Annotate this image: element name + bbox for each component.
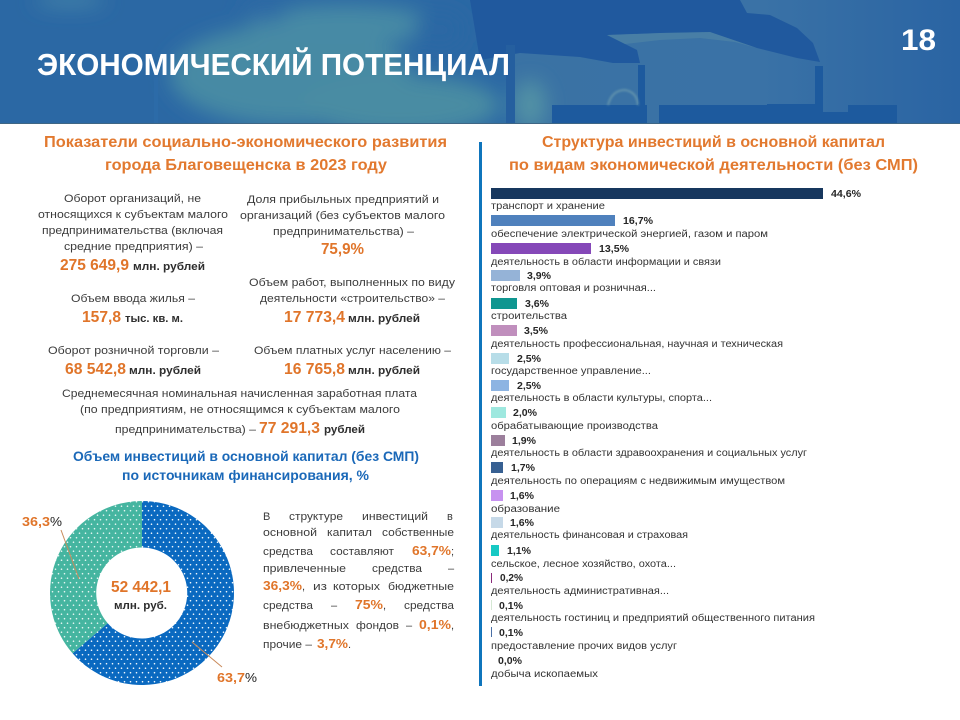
indicator: paid services: 16 765,8 xyxy=(284,361,345,378)
bar: other services xyxy=(491,627,677,652)
leader line 63.7 xyxy=(192,642,222,667)
bar: public administration xyxy=(491,353,651,377)
text block: investment structure description: бюджетные xyxy=(388,581,454,593)
indicator: average salary: (по предприятиям, не относящимся к субъектам малого xyxy=(80,404,400,416)
text block: investment structure description: средства xyxy=(263,546,314,558)
heading: investment sources: по источникам финансирования, % xyxy=(122,468,369,483)
indicator: organisations turnover: предпринимательства (включая xyxy=(42,225,223,237)
donut centre value: млн. руб. xyxy=(114,600,167,612)
text block: investment structure description: основной xyxy=(263,527,317,539)
bar: construction xyxy=(491,298,567,322)
indicator: organisations turnover: млн. рублей xyxy=(133,261,205,273)
leader line 36.3 xyxy=(61,530,79,579)
indicator: profitable enterprises share xyxy=(240,194,445,258)
text block: investment structure description: средства xyxy=(404,600,455,612)
indicator: profitable enterprises share: предпринимательства) – xyxy=(273,226,415,238)
text block: investment structure description: – xyxy=(448,563,455,575)
bar: mining xyxy=(491,656,598,680)
indicator: retail turnover: 68 542,8 xyxy=(65,361,126,378)
bar: trade: 3,9% xyxy=(527,271,551,282)
text block: investment structure description: фондов xyxy=(356,620,399,632)
indicator: housing: 157,8 xyxy=(82,309,121,326)
indicator: construction works: деятельности «строительство» – xyxy=(260,293,446,305)
bar: professional: деятельность профессиональная, научная и техническая xyxy=(491,338,783,350)
indicator: construction works: млн. рублей xyxy=(348,313,420,325)
bar: energy xyxy=(491,215,768,240)
bar: other services: предоставление прочих видов услуг xyxy=(491,641,677,652)
heading: investment structure: Структура инвестиций в основной капитал xyxy=(542,134,885,151)
text block: investment structure description: составляют xyxy=(330,546,394,558)
text block: investment structure description: собственные xyxy=(382,527,454,539)
text block: investment structure description: прочие – xyxy=(263,639,313,651)
text block: investment structure description: инвестиций xyxy=(362,511,428,523)
indicator: retail turnover xyxy=(48,345,220,378)
bar: hotels: 0,1% xyxy=(499,601,523,612)
bar chart: investments by activity xyxy=(491,188,861,680)
bar: manufacturing: 2,0% xyxy=(513,408,537,419)
indicator: average salary: 77 291,3 xyxy=(259,420,320,437)
text block: investment structure description: структуре xyxy=(289,511,343,523)
text block: investment structure description: средства xyxy=(263,600,314,612)
indicator: average salary: предпринимательства) – xyxy=(115,424,257,436)
indicator: profitable enterprises share: 75,9% xyxy=(321,241,364,258)
indicator: organisations turnover: средние предприятия) – xyxy=(64,241,204,253)
text block: investment structure description: капитал xyxy=(327,527,372,539)
label 63.7% xyxy=(217,670,257,685)
bar: trade xyxy=(491,270,656,294)
bar: finance: деятельность финансовая и страховая xyxy=(491,529,688,541)
bar: finance xyxy=(491,517,688,541)
bar: administrative: 0,2% xyxy=(500,573,523,584)
bar: administrative: деятельность административная... xyxy=(491,586,669,597)
label 36.3%: 36,3 xyxy=(22,514,50,529)
bar: agriculture: 1,1% xyxy=(507,546,531,557)
bar: mining: 0,0% xyxy=(498,656,522,667)
indicator: housing: тыс. кв. м. xyxy=(125,313,183,325)
donut centre value: 52 442,1 xyxy=(111,579,171,596)
bar: information: 13,5% xyxy=(599,244,629,255)
bar: transport: 44,6% xyxy=(831,189,861,200)
text block: investment structure description: , xyxy=(302,581,305,593)
indicator: profitable enterprises share: Доля прибыльных предприятий и xyxy=(247,194,439,206)
heading: social-economic indicators xyxy=(44,134,447,174)
donut segment: own funds 63.7% xyxy=(73,501,234,685)
bar: information xyxy=(491,243,721,268)
text block: investment structure description: 3,7% xyxy=(317,636,348,651)
bar: public administration: государственное управление... xyxy=(491,366,651,377)
bar: professional: 3,5% xyxy=(524,326,548,337)
indicator: profitable enterprises share: организаций (без субъектов малого xyxy=(240,210,445,222)
text block: investment structure description: , xyxy=(451,620,454,632)
heading: investment sources xyxy=(73,449,419,483)
bar: public administration: 2,5% xyxy=(517,354,541,365)
text block: investment structure description: , xyxy=(383,600,386,612)
bar: hotels xyxy=(491,600,815,624)
indicator: average salary xyxy=(62,388,418,437)
bar: education xyxy=(491,490,561,515)
text block: investment structure description: – xyxy=(331,600,338,612)
bar: information: деятельность в области информации и связи xyxy=(491,256,721,268)
bar: healthcare: деятельность в области здравоохранения и социальных услуг xyxy=(491,447,807,459)
page number: 18 xyxy=(901,24,936,57)
indicator: paid services: Объем платных услуг населению – xyxy=(254,345,452,357)
bar: culture: 2,5% xyxy=(517,381,541,392)
indicator: paid services: млн. рублей xyxy=(348,365,420,377)
heading: investment sources: Объем инвестиций в основной капитал (без СМП) xyxy=(73,449,419,464)
indicator: organisations turnover xyxy=(38,193,228,274)
label 36.3% xyxy=(22,514,62,529)
bar: culture: деятельность в области культуры, спорта... xyxy=(491,392,712,404)
bar: education: образование xyxy=(491,503,561,515)
indicator: average salary: рублей xyxy=(324,424,365,436)
text block: investment structure description: 63,7% xyxy=(412,543,451,558)
heading: investment structure xyxy=(509,134,918,174)
indicator: housing: Объем ввода жилья – xyxy=(71,293,196,305)
bar: real estate xyxy=(491,462,785,487)
heading: investment structure: по видам экономической деятельности (без СМП) xyxy=(509,157,918,174)
bar: transport: транспорт и хранение xyxy=(491,201,605,212)
indicator: organisations turnover: 275 649,9 xyxy=(60,257,129,274)
bar: manufacturing: обрабатывающие производства xyxy=(491,420,658,432)
indicator: retail turnover: Оборот розничной торговли – xyxy=(48,345,220,357)
label 36.3%: % xyxy=(50,514,62,529)
bar: culture xyxy=(491,380,712,404)
donut centre value xyxy=(111,579,171,612)
text block: investment structure description: В xyxy=(263,511,270,523)
text block: investment structure description: ; xyxy=(451,546,454,558)
indicator: organisations turnover: Оборот организаций, не xyxy=(64,193,201,205)
label 63.7%: 63,7 xyxy=(217,670,245,685)
bar: energy: 16,7% xyxy=(623,216,653,227)
heading: social-economic indicators: города Благовещенска в 2023 году xyxy=(105,157,387,174)
heading: social-economic indicators: Показатели социально-экономического развития xyxy=(44,134,447,151)
text block: investment structure description: . xyxy=(348,639,351,651)
bar: healthcare xyxy=(491,435,807,459)
indicator: paid services xyxy=(254,345,452,378)
bar: energy: обеспечение электрической энергией, газом и паром xyxy=(491,228,768,240)
label 63.7%: % xyxy=(245,670,257,685)
text block: investment structure description: в xyxy=(447,511,453,523)
text block: investment structure description: – xyxy=(406,620,413,632)
text block: investment structure description: 0,1% xyxy=(419,617,451,632)
bar: mining: добыча ископаемых xyxy=(491,668,598,680)
bar: trade: торговля оптовая и розничная... xyxy=(491,283,656,294)
donut segment: attracted funds 36.3% xyxy=(50,501,142,653)
bar: manufacturing xyxy=(491,407,658,432)
indicator: housing xyxy=(71,293,196,326)
donut chart: financing sources xyxy=(22,501,257,685)
text block: investment structure description: привлеченные xyxy=(263,563,346,575)
bar: transport xyxy=(491,188,861,212)
text block: investment structure description: 36,3% xyxy=(263,578,302,593)
bar: construction: 3,6% xyxy=(525,299,549,310)
bar: finance: 1,6% xyxy=(510,518,534,529)
bar: construction: строительства xyxy=(491,311,567,322)
indicator: construction works: Объем работ, выполненных по виду xyxy=(249,277,456,289)
text block: investment structure description: 75% xyxy=(355,597,383,612)
bar: agriculture: сельское, лесное хозяйство, охота... xyxy=(491,559,676,570)
text block: investment structure description: из xyxy=(313,581,327,593)
indicator: organisations turnover: относящихся к субъектам малого xyxy=(38,209,228,221)
bar: real estate: 1,7% xyxy=(511,463,535,474)
text block: investment structure description xyxy=(263,511,455,651)
text block: investment structure description: которых xyxy=(333,581,381,593)
indicator: construction works: 17 773,4 xyxy=(284,309,345,326)
bar: other services: 0,1% xyxy=(499,628,523,639)
indicator: retail turnover: млн. рублей xyxy=(129,365,201,377)
header banner with factory background xyxy=(0,0,960,135)
vertical divider xyxy=(479,142,482,686)
text block: investment structure description: внебюджетных xyxy=(263,620,350,632)
bar: real estate: деятельность по операциям с недвижимым имуществом xyxy=(491,476,785,487)
bar: education: 1,6% xyxy=(510,491,534,502)
bar: agriculture xyxy=(491,545,676,570)
bar: professional xyxy=(491,325,783,350)
bar: healthcare: 1,9% xyxy=(512,436,536,447)
title: ЭКОНОМИЧЕСКИЙ ПОТЕНЦИАЛ xyxy=(37,46,510,82)
bar: hotels: деятельность гостиниц и предприятий общественного питания xyxy=(491,612,815,624)
text block: investment structure description: средства xyxy=(372,563,423,575)
indicator: construction works xyxy=(249,277,456,326)
indicator: average salary: Среднемесячная номинальная начисленная заработная плата xyxy=(62,388,418,400)
bar: administrative xyxy=(491,573,669,597)
